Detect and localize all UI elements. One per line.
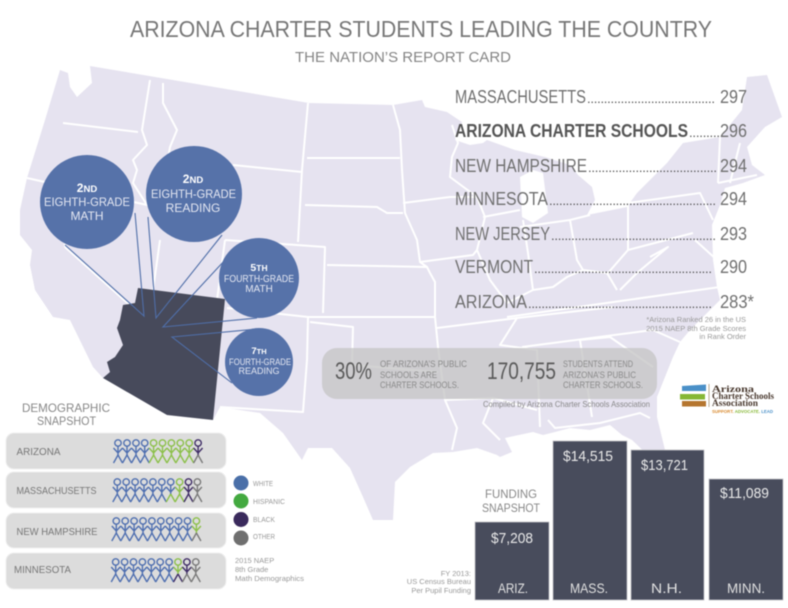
bar: Minnesota funding <box>709 479 783 600</box>
ranking list: .................................................. <box>549 193 716 208</box>
funding source note <box>407 569 471 595</box>
bar: Massachusetts funding <box>553 441 627 600</box>
ranking list: ..................................................... <box>534 261 712 276</box>
stats panel: SCHOOLS ARE <box>380 370 437 381</box>
ranking footnote <box>646 315 746 341</box>
ranking list: ARIZONA <box>455 292 527 312</box>
demographic row: Minnesota: MINNESOTA <box>14 564 71 576</box>
demographic row: Arizona: ARIZONA <box>16 446 60 458</box>
logo: Arizona Charter Schools Association <box>680 384 774 414</box>
ranking list: MINNESOTA <box>455 189 548 209</box>
bar: Massachusetts funding: MASS. <box>570 580 608 596</box>
demographic source note: 2015 NAEP <box>235 556 274 565</box>
heading: demographic snapshot: SNAPSHOT <box>37 414 97 428</box>
ranking list: 290 <box>720 257 747 277</box>
compiled-by credit: Compiled by Arizona Charter Schools Association <box>483 399 650 409</box>
callout: 2nd eighth-grade reading: 2ND <box>183 172 203 186</box>
callout: 2nd eighth-grade reading: EIGHTH-GRADE <box>151 187 236 201</box>
ranking list: 283* <box>720 292 754 312</box>
callout: 7th fourth-grade reading: 7TH <box>251 346 267 357</box>
demographic row: New Hampshire <box>6 513 226 548</box>
demographic row: Massachusetts: MASSACHUSETTS <box>16 485 96 497</box>
ranking list: ...................................... <box>587 91 715 106</box>
bar: Arizona funding <box>475 522 549 600</box>
stats panel: 170,755 <box>487 358 556 385</box>
stats panel: OF ARIZONA’S PUBLIC <box>380 359 467 370</box>
ranking list: ................................................. <box>551 228 716 243</box>
callout: 2nd eighth-grade math: 2ND <box>77 181 97 195</box>
ranking list: NEW JERSEY <box>455 224 550 244</box>
funding source note: FY 2013: <box>441 569 471 578</box>
bar: Minnesota funding: $11,089 <box>720 485 769 502</box>
logo: Arizona Charter Schools Association: Arizona <box>712 385 754 395</box>
ranking list: ....................................................... <box>528 296 712 311</box>
stats panel: STUDENTS ATTEND <box>563 359 633 370</box>
bar: New Hampshire funding: N.H. <box>651 580 682 596</box>
demographic row: Massachusetts <box>6 472 226 508</box>
callout: 5th fourth-grade math: MATH <box>245 284 273 295</box>
callout: 2nd eighth-grade reading <box>146 146 242 318</box>
ranking list: 297 <box>720 87 747 107</box>
ranking list: VERMONT <box>455 257 533 277</box>
demographic source note: Math Demographics <box>235 574 304 583</box>
callout: 2nd eighth-grade math: EIGHTH-GRADE <box>44 195 130 209</box>
callout: 2nd eighth-grade math: MATH <box>70 209 104 223</box>
bar: Minnesota funding: MINN. <box>727 580 765 596</box>
heading: funding snapshot: SNAPSHOT <box>482 503 540 515</box>
callout: 2nd eighth-grade math <box>40 155 144 316</box>
map of the United States <box>20 66 782 520</box>
subtitle: THE NATION’S REPORT CARD <box>295 49 511 66</box>
callout: 2nd eighth-grade reading: READING <box>166 201 220 215</box>
ranking list: 294 <box>720 189 747 209</box>
demographic legend: OTHER <box>253 532 275 541</box>
callout: 5th fourth-grade math: 5TH <box>250 262 268 274</box>
heading: demographic snapshot: DEMOGRAPHIC <box>22 401 110 415</box>
demographic legend: WHITE <box>253 479 273 488</box>
ranking list: MASSACHUSETTS <box>455 87 586 107</box>
ranking footnote: in Rank Order <box>699 332 746 341</box>
demographic legend: BLACK <box>253 515 275 524</box>
ranking list: ......... <box>689 125 720 140</box>
callout: 5th fourth-grade math <box>163 238 299 327</box>
demographic legend <box>234 476 286 546</box>
ranking list: 296 <box>720 121 747 141</box>
bar: Arizona funding: $7,208 <box>491 530 533 547</box>
Arizona state shape <box>103 288 225 420</box>
demographic source note: 8th Grade <box>235 565 268 574</box>
bar: Massachusetts funding: $14,515 <box>563 448 613 465</box>
demographic legend: HISPANIC <box>253 497 286 506</box>
ranking list: NEW HAMPSHIRE <box>455 156 587 176</box>
stats panel: CHARTER SCHOOLS. <box>563 380 643 391</box>
stats panel: CHARTER SCHOOLS. <box>380 380 459 391</box>
stats panel: 30% <box>335 358 372 385</box>
callout: 5th fourth-grade math: FOURTH-GRADE <box>224 274 294 285</box>
funding source note: Per Pupil Funding <box>411 586 471 595</box>
bar: Arizona funding: ARIZ. <box>498 580 528 596</box>
ranking list: 293 <box>720 224 747 244</box>
demographic row: New Hampshire: NEW HAMPSHIRE <box>16 526 98 538</box>
demographic row: Minnesota <box>6 553 226 589</box>
stats panel <box>322 348 657 399</box>
demographic source note <box>235 556 304 583</box>
ranking footnote: 2015 NAEP 8th Grade Scores <box>646 324 746 333</box>
stats panel: ARIZONA’S PUBLIC <box>563 370 636 381</box>
ranking list: ARIZONA CHARTER SCHOOLS <box>455 121 688 141</box>
logo: Arizona Charter Schools Association: SUPPORT. ADVOCATE. LEAD <box>712 409 774 414</box>
ranking footnote: *Arizona Ranked 26 in the US <box>646 315 746 324</box>
funding source note: US Census Bureau <box>407 577 471 586</box>
heading: demographic snapshot <box>22 401 110 428</box>
bar: New Hampshire funding: $13,721 <box>641 457 688 474</box>
callout: 7th fourth-grade reading <box>172 328 293 396</box>
ranking list: ...................................... <box>588 160 717 175</box>
callout: 7th fourth-grade reading: FOURTH-GRADE <box>229 357 291 367</box>
heading: funding snapshot: FUNDING <box>485 489 537 501</box>
ranking list: 294 <box>720 156 747 176</box>
callout: 7th fourth-grade reading: READING <box>238 366 280 376</box>
logo: Arizona Charter Schools Association: Association <box>712 399 759 409</box>
bar: New Hampshire funding <box>631 450 704 600</box>
demographic row: Arizona <box>6 433 226 469</box>
ranking list <box>455 87 754 312</box>
logo: Arizona Charter Schools Association: Charter Schools <box>712 392 774 402</box>
title: ARIZONA CHARTER STUDENTS LEADING THE COUNTRY <box>130 16 712 42</box>
heading: funding snapshot <box>482 489 540 515</box>
